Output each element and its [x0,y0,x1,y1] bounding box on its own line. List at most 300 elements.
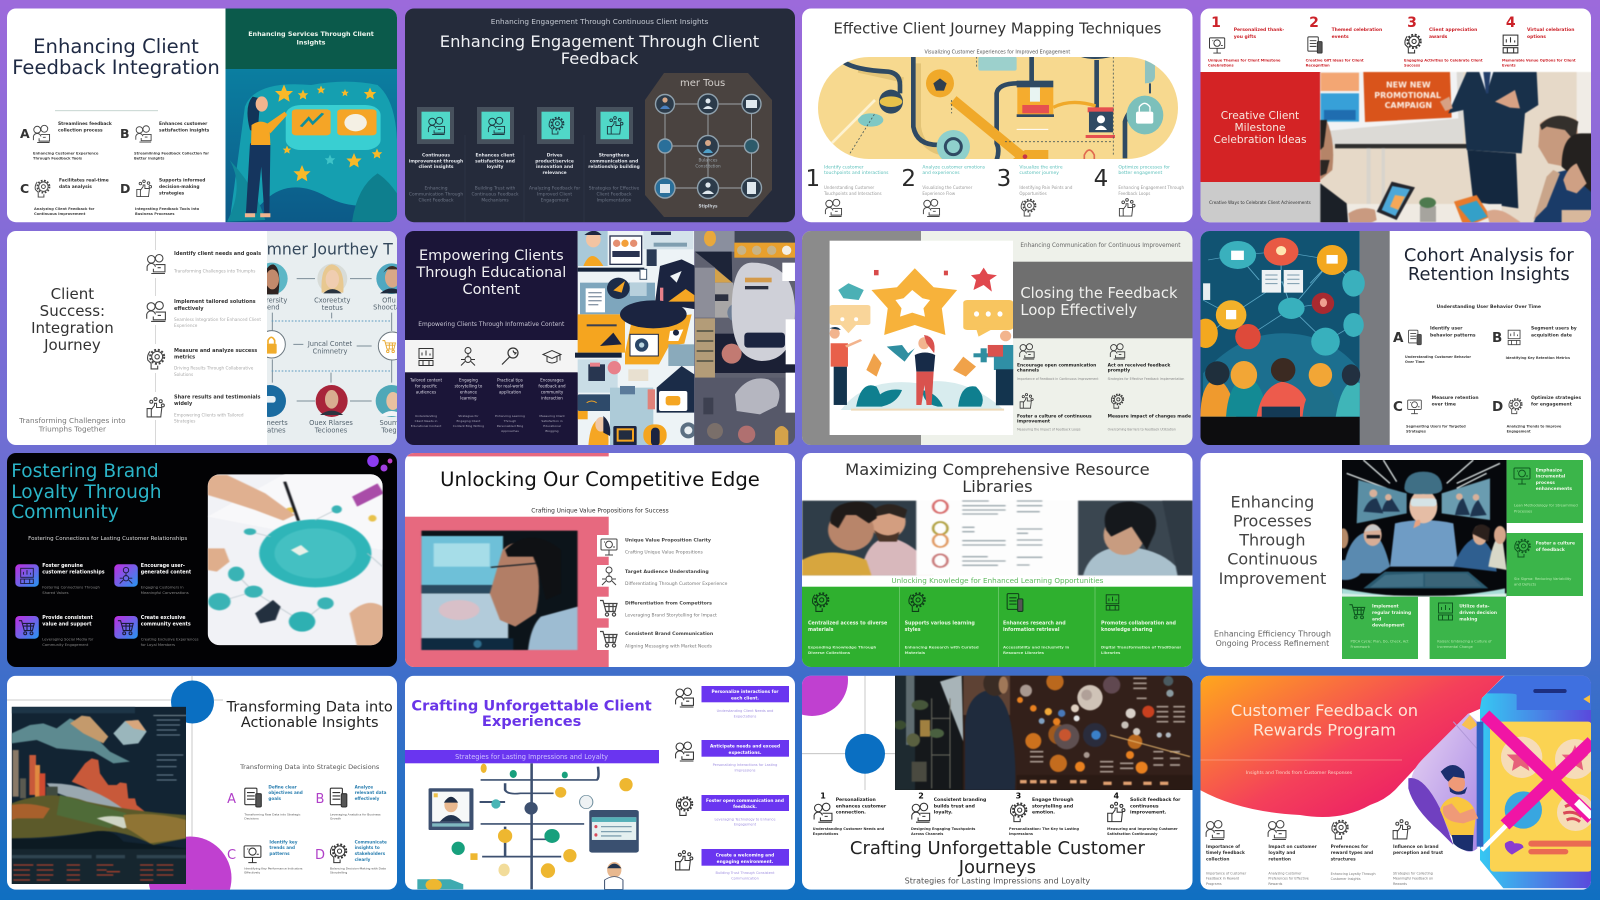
item A: behavior patterns [1430,332,1476,338]
item headings: structures [1331,856,1356,862]
subtitle: Transforming Data into Strategic Decisions [239,763,380,771]
slide: Customer Feedback on Rewards Program [1200,675,1595,890]
green panel headings: Centralized access to diverse [808,620,888,626]
steps: Share results and testimonials [174,394,260,400]
green card 4: Utilize data- [1459,604,1490,610]
photo: presentation: CAMPAIGN [1385,101,1432,110]
title: Processes [1233,512,1312,530]
slide: Client Success: Integration Journey [7,231,408,445]
image: customer journey chart: Cnimnetry [313,348,347,356]
item 2: Engaging Customers in [141,586,184,590]
title: Feedback [561,49,639,68]
green card 1: Lean Methodology for Streamlined [1514,504,1578,508]
item C: data analysis [59,184,92,190]
list items: Differentiating Through Customer Experience [625,581,728,587]
network diagram: Bulances [699,158,717,162]
item headings: storytelling to [454,384,483,388]
item captions: Designing Engaging Touchpoints [911,827,975,831]
title: Rewards Program [1253,720,1396,740]
item B: Leveraging Analytics for Business [330,813,381,817]
banner [405,750,659,763]
icons [814,802,1125,822]
subtitle: Visualizing Customer Experiences for Improved Engagement [925,50,1070,56]
item B: Growth [330,817,341,821]
item headings: Enhances client [476,152,514,158]
item 4: Creating Exclusive Experiences [141,638,199,642]
item 2: generated content [141,570,192,576]
subtitle: Understanding User Behavior Over Time [1437,304,1541,310]
item C: C [227,848,236,863]
item captions: Content Blog Writing [453,424,484,428]
item headings: interaction [541,396,563,400]
slide: Crafting Unforgettable Client Experiences [405,676,795,891]
subtitle: Ongoing Process Refinement [1216,639,1329,648]
image: customer journey chart [267,231,397,445]
numbers: 3 [1407,15,1417,31]
numbers: 1 [1211,15,1221,31]
item captions: Enhancing Learning [495,414,525,418]
item captions: Enhancing [424,186,448,192]
item captions: Rewards [1268,882,1283,886]
item D: strategies [159,190,185,196]
item captions: Importance of Customer [1206,872,1247,876]
item D: Balancing Decision-Making with Data [330,867,386,871]
subtitle: Creative Ways to Celebrate Client Achievements [1209,200,1311,205]
green card 1 [1507,460,1583,523]
side captions: Building Trust Through Consistent [715,871,775,875]
title: Closing the Feedback [1020,285,1178,302]
item C: Identify key [269,840,298,844]
list items: Target Audience Understanding [625,569,709,575]
photo: man at monitor [421,531,578,650]
title: Crafting Unforgettable Customer [850,838,1145,859]
item 3 [15,615,94,647]
item headings: loyalty [487,164,504,170]
side box labels: engaging environment. [717,859,774,865]
numbers: 2 [1309,15,1319,31]
slide: Unlocking Our Competitive Edge [405,453,795,668]
item D [1492,395,1581,434]
item A: objectives and [268,790,303,795]
item captions: Understanding [415,414,437,418]
item headings: Client appreciation [1429,27,1477,33]
side box labels: each client. [731,696,759,702]
green card 1: enhancements [1536,486,1572,492]
steps [147,251,261,424]
green card 1: Processes [1514,510,1532,514]
item 2: Meaningful Conversations [141,591,189,595]
item 3: Provide consistent [42,615,93,621]
item headings: relationship building [588,164,640,170]
item headings: Influence on brand [1393,844,1439,850]
item captions: Rewards [1393,882,1407,886]
item 4: Create exclusive [141,615,186,621]
title: Integration [31,319,114,337]
steps: Measure and analyze success [174,348,257,354]
item D: Storytelling [330,871,347,875]
item D: Integrating Feedback Tools into [135,207,200,211]
item captions: Implementation [597,198,632,204]
item A: Understanding Customer Behavior [1405,355,1471,359]
green card 2 [1507,533,1583,596]
list items: Leveraging Brand Storytelling for Impact [625,613,717,619]
image: customer journey chart: Toeg [380,427,397,435]
image: customer journey chart: Oflu [382,297,396,305]
item D: Analyzing Trends to Improve [1507,424,1562,428]
green card 2: Six Sigma: Reducing Variability [1514,577,1572,581]
slide: Enhancing Engagement Through Client Feedback [405,8,795,222]
steps: metrics [174,354,195,360]
item captions: Enhancing Loyalty Through [1331,872,1376,876]
item B: Enhances customer [159,121,208,127]
item A: Define clear [268,784,298,790]
step captions: Experience Flow [922,191,956,196]
item C [227,840,303,875]
item captions: Feedback in Reward [1206,876,1239,880]
green panel captions: Materials [905,650,926,655]
item C: Identifying Key Performance Indicators [244,867,303,871]
step numbers: 4 [1094,166,1108,192]
item D: Supports informed [159,178,205,184]
item headings: audiences [416,390,436,394]
item captions: Events [1502,64,1516,68]
item headings: for real-world [497,384,524,388]
green card 2: Foster a culture [1536,540,1575,546]
item captions: Through [503,419,516,423]
item headings: connection. [836,810,866,816]
item D: for engagement [1531,402,1573,408]
gradient shape [1200,675,1505,817]
side box labels: Foster open communication and [706,798,784,804]
item headings: Strengthens [599,152,630,158]
item headings: innovation and [536,164,573,170]
title: Enhancing Client [33,35,199,58]
green card 4: making [1459,616,1477,622]
title: Effective Client Journey Mapping Techniques [834,20,1161,38]
green card 3: and [1372,616,1381,622]
step headings: Analyze customer emotions [922,164,986,170]
item headings: improvement. [1130,810,1167,816]
item captions: Measuring and Improving Customer [1107,827,1178,831]
title: Success: [40,302,105,320]
item headings: awards [1429,34,1448,40]
item headings: loyalty. [934,810,953,816]
title: Maximizing Comprehensive Resource [845,460,1150,479]
item D: D [315,848,325,863]
slide: Creative Client Milestone Celebration Ideas [1200,8,1597,225]
item headings: Engage through [1032,797,1074,803]
title: Through Educational [415,265,566,281]
item C [1393,395,1479,434]
network diagram: Stiplhys [698,204,718,208]
item icons [1210,35,1518,53]
item A: Transforming Raw Data into Strategic [243,813,301,817]
item headings: enhances customer [836,803,887,809]
illustration: journey map pill [818,57,1178,159]
item headings: Tailored content [409,378,442,382]
item headings: product/service [535,158,574,164]
item captions: Building Trust with [475,186,515,192]
green panel captions: Libraries [1101,650,1121,655]
slide: Closing the Feedback Loop Effectively [802,231,1194,445]
slide: Effective Client Journey Mapping Techniques [802,8,1193,222]
title: Customer Feedback on [1231,701,1418,720]
title: Loyalty Through [11,482,162,503]
title: Libraries [962,477,1033,496]
green card 2: and Defects [1514,582,1536,586]
step numbers: 3 [997,166,1011,192]
item captions: Understanding Customer Needs and [813,827,885,831]
photo: presentation [1320,72,1597,225]
item 1: Shared Values [42,591,69,595]
title: Loop Effectively [1020,302,1137,319]
item captions: Customer Insights [1331,877,1361,881]
side box labels: expectations. [729,750,762,756]
green card 3: development [1372,622,1404,628]
step captions: Opportunities [1019,191,1047,196]
title: Client [51,285,94,303]
list items [597,535,728,650]
steps: Identify client needs and goals [174,251,261,257]
item A: A [1393,330,1404,346]
item headings: application [499,390,521,394]
item captions: Impressions [1009,832,1033,836]
green panel icons [812,593,1119,611]
title: Experiences [482,713,581,730]
item C: Strategies [1406,430,1426,434]
item 2 [114,563,192,595]
illustration: phone and character [1408,676,1595,888]
step captions: Visualizing the Customer [922,185,973,190]
item captions: Strategies for Effective [589,186,639,192]
icon row [417,107,633,144]
numbers: 4 [1506,15,1516,31]
side captions: Expectations [734,715,756,719]
numbers: 1 [820,792,826,800]
title: Fostering Brand [11,461,159,482]
item 4 [114,615,199,647]
green card 1: Emphasize [1536,468,1562,474]
item captions: Measuring the Impact of Feedback Loops [1017,428,1081,432]
item C: Measure retention [1432,395,1479,401]
item 3: Leveraging Social Media for [42,638,94,642]
image: customer journey chart: Soum [379,419,398,427]
item A: Streamlines feedback [58,121,112,127]
item B: Better Insights [134,156,164,160]
item captions: Preferences for Effective [1268,876,1309,880]
green card 4 [1430,597,1506,659]
photo: man viewing data wall [894,671,1195,790]
item headings: Foster a culture of continuous [1017,413,1092,419]
slide: Cohort Analysis for Retention Insights [1187,231,1592,446]
steps: widely [174,401,193,407]
item captions: Recognition [1306,64,1330,68]
magenta circle [148,836,232,900]
item D: insights to [355,845,380,850]
item headings: for specific [415,384,437,388]
item headings: Preferences for [1331,844,1369,850]
item captions: Communication Through [409,192,463,198]
item headings: relevance [543,170,567,176]
item headings: emotion. [1032,810,1055,816]
image: customer journey chart: end [267,303,280,311]
step numbers: 1 [805,166,820,192]
subtitle: Enhancing Efficiency Through [1214,630,1331,638]
item D [120,178,205,216]
item A: A [227,792,236,807]
title: Journey [43,336,101,354]
item D [315,840,387,875]
magenta circle [776,644,848,716]
title: Cohort Analysis for [1404,245,1574,266]
step captions: Understanding Customer [824,185,875,190]
step headings: Optimize processes for [1118,164,1170,170]
eyebrow: Enhancing Communication for Continuous Improvement [1020,243,1181,249]
item A [20,121,112,160]
subtitle: Insights and Trends from Customer Responses [1246,770,1353,776]
steps: Seamless Integration for Enhanced Client [174,317,261,322]
side captions: Personalizing Interactions for Lasting [713,763,777,767]
item captions: Approaches [501,429,519,433]
green panel headings: materials [808,627,834,633]
image: customer journey chart: rersity [266,297,287,305]
slide: Enhancing Client Feedback Integration [7,8,398,223]
item headings: client insights [418,164,454,170]
step headings: Visualize the entire [1019,164,1063,170]
item headings: improvement [1017,418,1050,424]
title: Creative Client [1221,110,1299,122]
title: Continuous [1227,550,1318,568]
green card 3: Implement [1372,604,1399,610]
item headings: Themed celebration [1332,27,1382,33]
pink panel [405,517,609,668]
side boxes [702,686,789,866]
steps: Experience [174,323,198,328]
banner text: Strategies for Lasting Impressions and Loyalty [455,753,608,761]
title: Milestone [1235,122,1285,134]
slide: Enhancing Processes Through Continuous Improvement [1200,453,1592,667]
green card 3 [1342,597,1418,659]
item D: clearly [355,857,371,862]
step headings: touchpoints and interactions [824,170,889,176]
image: customer journey chart: omner Jourthey T [257,239,393,258]
network diagram: Constitetion [695,164,721,168]
item captions: Engagement [541,198,569,204]
item headings: Importance of [1206,844,1240,850]
steps: Driving Results Through Collaborative [174,366,254,371]
image: customer journey chart: Cxoreetxty [314,297,351,305]
item headings: continuous [1130,803,1159,809]
step headings: Identify customer [824,164,864,170]
green card 4: Incremental Change [1437,645,1473,649]
green card 1: process [1536,480,1555,486]
title panel [1013,262,1194,338]
step headings: customer journey [1019,170,1059,176]
item captions: Strategies for Effective Feedback Implementation [1108,377,1184,381]
item captions: Memorable Venue Options for Client [1502,58,1576,62]
item 1 [15,563,105,595]
steps: Transforming Challenges into Triumphs [173,269,256,274]
title: Transforming Data into [226,700,393,716]
title: Enhancing Engagement Through Client [440,32,759,51]
illustration: woman with rating panel [226,69,398,223]
item captions: Success [1404,64,1420,68]
icons [419,348,561,366]
item 1: Fostering Connections Through [42,586,100,590]
item headings: enhance [460,390,478,394]
photo band [802,500,1193,575]
side captions: Leveraging Technology to Enhance [714,817,776,821]
subtitle: Unlocking Knowledge for Enhanced Learning Opportunities [891,576,1104,585]
green panel captions: Accessibility and Inclusivity in [1003,645,1070,650]
slide: Fostering Brand Loyalty Through Community [7,453,397,667]
item headings: Impact on customer [1268,844,1318,850]
subtitle: Strategies for Lasting Impressions and Loyalty [905,876,1090,886]
green card 4: driven decision [1459,610,1497,616]
step icons [825,199,1135,217]
item headings: learning [460,396,477,400]
subtitle: Triumphs Together [38,424,106,434]
network diagram: mer Tous [680,78,725,89]
icon band [405,340,578,372]
side box labels: Personalize interactions for [711,689,779,695]
item A: Enhancing Customer Experience [33,152,99,156]
item headings: perception and trust [1393,850,1443,856]
list items: Consistent Brand Communication [625,631,713,637]
item B: B [316,792,324,807]
slide: Transforming Data into Actionable Insights [7,675,397,900]
green panel headings: Supports various learning [905,620,975,626]
image: customer journey chart: nneerts [262,419,288,427]
side captions: Understanding Client Needs and [717,709,773,713]
green panel headings: styles [905,627,921,633]
step captions: Feedback Loops [1118,191,1150,196]
subtitle: Fostering Connections for Lasting Customer Relationships [28,536,187,542]
item B: B [1492,330,1502,346]
image: customer journey chart: Juncal Contet [307,340,353,348]
image: customer journey chart: Tecioones [314,427,348,435]
item 2: Encourage user- [141,563,185,569]
illustration: network and audience [1187,231,1365,446]
side box labels: Anticipate needs and exceed [710,743,780,749]
photo: presentation: PROMOTIONAL [1374,91,1441,100]
image: 3D data landscape [12,707,187,884]
item headings: Encourage open communication [1017,363,1096,369]
header text: Insights [297,39,326,47]
photo: brand strategy map [208,473,384,647]
subtitle: Transforming Challenges into [18,416,126,425]
item A: Decisions [244,817,259,821]
eyebrow: Enhancing Engagement Through Continuous Client Insights [491,17,708,26]
item captions: Mechanisms [481,198,509,204]
item C: Effectively [244,871,260,875]
item headings: storytelling and [1032,803,1073,809]
item B: Streamlining Feedback Collection for [134,152,209,156]
item headings: satisfaction and [475,158,515,164]
slide: Empowering Clients Through Educational Content [405,230,796,446]
item A [227,784,303,821]
item headings: promptly [1108,368,1130,374]
item headings: communication and [590,158,638,164]
item headings: builds trust and [934,803,975,809]
item B: relevant data [355,790,387,795]
item captions: Improved Client [537,192,572,198]
photo: presentation: NEW NEW [1386,80,1431,89]
item B: B [120,126,130,141]
steps: Empowering Clients with Tailored [174,413,244,418]
side icons [676,688,693,870]
item captions: Blogging [545,429,559,433]
